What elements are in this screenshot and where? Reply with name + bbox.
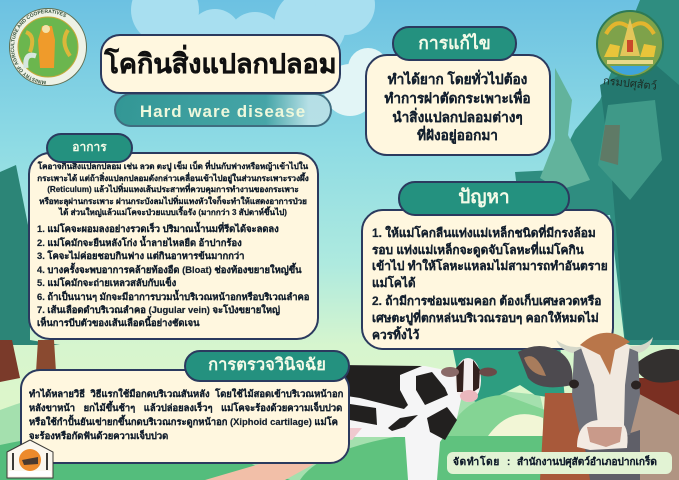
problem text: ควรทิ้งไว้ [372,328,419,342]
symptoms intro text [37,160,309,218]
logo: Department of Livestock seal [596,10,664,78]
diagnosis text: หลังขาหน้า ยกไม้ขึ้นช้าๆ แล้วปล่อยลงเร็วๆ แม่โคจะร้องด้วยความเจ็บปวด [29,402,342,413]
subtitle pill [114,93,332,127]
heading: symptoms: อาการ [72,140,107,154]
symptoms intro text: ได้ ส่วนใหญ่แล้วแม่โคจะป่วยแบบเรื้อรัง (มากกว่า 3 สัปดาห์ขึ้นไป) [59,208,287,217]
problem text: 1. ให้แม่โคกลืนแท่งแม่เหล็กชนิดที่มีกรงล้อม [372,226,596,240]
problem text: แม่โคได้ [372,276,416,290]
title [100,34,341,94]
label: department name: กรมปศุสัตว์ [602,75,657,93]
subtitle pill: Hard ware disease [140,102,306,121]
symptoms list [37,222,309,328]
right forest [515,0,679,345]
symptoms list: 7. เส้นเลือดดำบริเวณลำคอ (Jugular vein) จะโป่งขยายใหญ่ [37,304,280,315]
treatment text: ที่ฝังอยู่ออกมา [417,128,498,143]
symptoms intro text: หรือทะลุผ่านกระเพาะ ผ่านกระบังลมไปทิ่มแทงหัวใจก็จะทำให้แสดงอาการป่วย [39,197,307,206]
problem text [372,224,608,342]
symptoms intro text: โคอาจกินสิ่งแปลกปลอม เช่น ลวด ตะปู เข็ม เบ็ด ที่ปนกับฟางหรือหญ้าเข้าไปใน [38,162,308,171]
problem text: 2. ถ้ามีการซ่อมแซมคอก ต้องเก็บเศษลวดหรือ [372,294,601,308]
heading: problem: ปัญหา [458,187,510,208]
footer credit: สำนักงานปศุสัตว์อำเภอปากเกร็ด [517,457,657,468]
logo: Ministry of Agriculture seal: MINISTRY OF AGRICULTURE AND COOPERATIVES [10,10,66,84]
heading: diagnosis [184,350,350,382]
left tree [0,165,60,345]
symptoms list: 5. แม่โคมักจะถ่ายเหลวสลับกับแข็ง [37,277,176,288]
heading: symptoms [46,133,133,163]
heading: treatment [392,26,517,61]
diagnosis text [29,388,343,441]
symptoms list: เห็นการบีบตัวของเส้นเลือดนี้อย่างชัดเจน [37,317,200,328]
problem text: เศษตะปูที่ตกหล่นบริเวณรอบๆ คอกให้หมดไม่ [372,311,599,325]
treatment text: ทำการผ่าตัดกระเพาะเพื่อ [384,91,531,106]
symptoms intro text: (Reticulum) แล้วไปทิ่มแทงเส้นประสาทที่ควบคุมการทำงานของกระเพาะ [47,185,299,194]
diagnosis text: จะร้องหรือกัดฟันด้วยความเจ็บปวด [29,430,168,441]
heading: treatment: การแก้ไข [418,33,491,53]
heading: problem [398,181,570,216]
footer credit: : [507,457,510,468]
treatment text: ทำได้ยาก โดยทั่วไปต้อง [388,72,527,87]
heading: diagnosis: การตรวจวินิจฉัย [208,356,326,374]
panel: treatment [365,54,551,156]
panel: diagnosis [20,369,350,464]
footer credit [447,452,672,474]
logo: farm house [6,439,54,478]
problem text: รอบ แท่งแม่เหล็กจะดูดจับโลหะที่แม่โคกิน [372,243,584,257]
problem text: เข้าไป ทำให้โลหะแหลมไม่สามารถทำอันตราย [372,259,608,273]
footer credit: จัดทำโดย [453,457,500,468]
panel: problem [361,209,614,350]
panel: symptoms [28,152,319,340]
symptoms list: 6. ถ้าเป็นนานๆ มักจะมีอาการบวมน้ำบริเวณหน้าอกหรือบริเวณลำคอ [37,291,309,302]
symptoms list: 2. แม่โคมักจะยืนหลังโก่ง น้ำลายไหลยืด อ้าปากร้อง [37,237,242,248]
diagnosis text: หรือใช้กำปั้นยันเข่ายกขึ้นกดบริเวณกระดูกหน้าอก (Xiphoid cartilage) แม่โค [29,416,338,427]
symptoms intro text: กระเพาะได้ แต่ถ้าสิ่งแปลกปลอมดังกล่าวเคลื่อนเข้าไปอยู่ในส่วนกระเพาะรวงผึ้ง [37,174,309,183]
symptoms list: 1. แม่โคจะผอมลงอย่างรวดเร็ว ปริมาณน้ำนมที่รีดได้จะลดลง [37,223,279,234]
treatment text: นำสิ่งแปลกปลอมต่างๆ [392,110,523,125]
symptoms list: 4. บางครั้งจะพบอาการคล้ายท้องอืด (Bloat) ช่องท้องขยายใหญ่ขึ้น [37,264,302,275]
symptoms list: 3. โคจะไม่ค่อยชอบกินฟาง แต่กินอาหารข้นมากกว่า [37,250,244,261]
title: โคกินสิ่งแปลกปลอม [104,49,337,79]
diagnosis text: ทำได้หลายวิธี วิธีแรกใช้มือกดบริเวณสันหลัง โดยใช้ไม้สอดเข้าบริเวณหน้าอก [29,388,343,399]
treatment text [384,70,531,144]
